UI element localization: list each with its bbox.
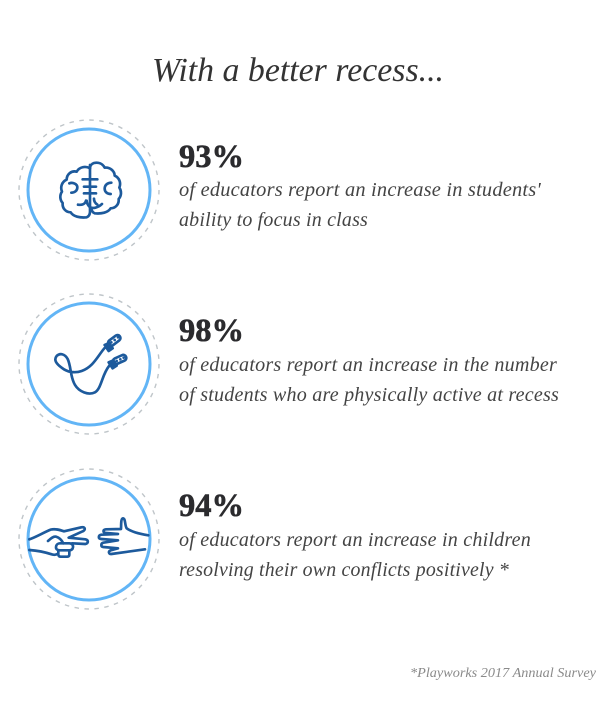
panel: conflict resolution statistic [19, 469, 531, 609]
statistic: 93%: 93% [179, 139, 244, 175]
statistic: 94%: 94% [179, 488, 244, 524]
description: focus: ability to focus in class [179, 209, 368, 231]
description: physical activity: of students who are physically active at recess [179, 384, 559, 406]
description: conflict resolution: of educators report an increase in children [179, 529, 531, 551]
icon: jump rope in circle [19, 294, 159, 434]
title: With a better recess... [152, 52, 444, 89]
panel: physical activity statistic [19, 294, 559, 434]
description: conflict resolution: resolving their own conflicts positively * [179, 559, 509, 581]
footnote: *Playworks 2017 Annual Survey [410, 666, 597, 681]
icon: brain in circle [19, 120, 159, 260]
description: physical activity: of educators report an increase in the number [179, 354, 557, 376]
panel: focus statistic [19, 120, 542, 260]
icon: rock paper scissors hands in circle [19, 469, 159, 609]
statistic: 98%: 98% [179, 313, 244, 349]
description: focus: of educators report an increase in students' [179, 179, 542, 201]
